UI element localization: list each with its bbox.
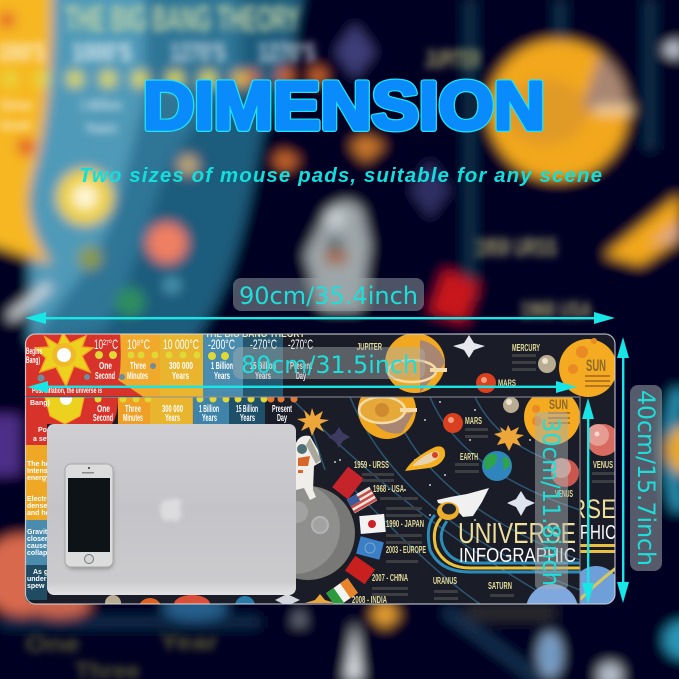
- small mouse pad 80x30: Electro: [27, 496, 51, 503]
- sun upper: SUN: [586, 356, 606, 375]
- white star upper: [453, 335, 485, 358]
- small mouse pad 80x30: Intense: [27, 468, 52, 475]
- upper pad timeline labels: -270°C: [288, 336, 313, 352]
- small mouse pad 80x30: Years: [202, 413, 217, 424]
- small mouse pad 80x30: Post: [38, 427, 54, 434]
- dimension 40cm arrow: [617, 337, 629, 603]
- blue planet lower: [526, 584, 578, 604]
- large mouse pad 90x40: JUPITER: [357, 342, 382, 353]
- small mouse pad 80x30: dense: [27, 503, 47, 510]
- large mouse pad 90x40: Years: [214, 371, 230, 382]
- venus upper: [589, 424, 615, 456]
- blurred space background: 1000'S: [72, 37, 132, 67]
- blurred space background: 1270'S: [170, 37, 226, 67]
- blurred space background: One: [0, 97, 32, 114]
- planet lower jupiter: [358, 398, 417, 439]
- large mouse pad 90x40: VENUS: [593, 460, 613, 471]
- title: DIMENSION: [143, 68, 545, 144]
- mars upper: [476, 373, 496, 393]
- orange star: [297, 408, 329, 436]
- dimension 30cm label: 30cm/11.8inch: [537, 418, 565, 586]
- left timeline panel: [25, 397, 265, 600]
- venus lower: [551, 458, 579, 487]
- small mouse pad 80x30: 15 Billion: [236, 404, 258, 415]
- large mouse pad 90x40: [25, 329, 620, 614]
- small mouse pad 80x30: The hot: [27, 461, 53, 468]
- orange star right: [494, 425, 524, 451]
- small mouse pad 80x30: and hot: [27, 510, 53, 517]
- small mouse pad 80x30: Minutes: [123, 413, 143, 424]
- mission labels: 1959 - URSS: [354, 460, 389, 471]
- dimension 30cm arrow: [582, 398, 594, 604]
- subtitle: Two sizes of mouse pads, suitable for any scene: [79, 164, 602, 187]
- large mouse pad 90x40: Years: [255, 371, 271, 382]
- small mouse pad 80x30: Bang): [30, 400, 50, 407]
- mission labels: URANUS: [433, 576, 457, 587]
- sun lower: SUN: [549, 396, 568, 412]
- large mouse pad 90x40: Post inflation, the universe is: [32, 386, 102, 395]
- large mouse pad 90x40: THE BIG BANG THEORY: [205, 329, 305, 340]
- blurred space background: 1270'S: [258, 37, 316, 67]
- earth: [482, 451, 512, 481]
- large mouse pad 90x40: Three: [130, 361, 146, 372]
- small mouse pad 80x30: [25, 398, 580, 604]
- blurred space background: 1968 USA: [520, 297, 592, 324]
- small mouse pad 80x30: Day: [277, 413, 287, 424]
- upper universe heading: RSE: [570, 494, 616, 524]
- large mouse pad 90x40: Present: [290, 361, 312, 372]
- blurred space background: 1 Billion: [80, 97, 122, 114]
- white star lower: [507, 491, 535, 516]
- upper pad timeline labels: [94, 340, 313, 349]
- blurred space background: Year: [160, 629, 218, 656]
- small mouse pad 80x30: under: [27, 576, 47, 583]
- small mouse pad 80x30: energy: [27, 475, 50, 482]
- large mouse pad 90x40: Bang): [26, 355, 40, 365]
- upper pad timeline labels: 10²⁷°C: [94, 336, 118, 352]
- blue planet upper: [580, 566, 615, 604]
- logo swoosh arcs: [428, 515, 580, 572]
- small mouse pad 80x30: 300 000: [162, 404, 183, 415]
- small mouse pad 80x30: closer: [27, 536, 48, 543]
- small mouse pad 80x30: Present: [272, 404, 292, 415]
- mission labels: 2007 - CHINA: [372, 573, 408, 584]
- large mouse pad 90x40: 15 Billion: [250, 361, 276, 372]
- small mouse pad 80x30: collap: [27, 550, 47, 557]
- mission labels: 1968 - USA: [373, 484, 404, 495]
- universe infographic heading: UNIVERSE: [458, 518, 576, 550]
- upper pad timeline labels: 10⁸°C: [127, 336, 150, 352]
- mission labels: 2003 - EUROPE: [386, 545, 426, 556]
- large mouse pad 90x40: MARS: [498, 378, 516, 388]
- large mouse pad 90x40: Second: [95, 371, 115, 382]
- mission labels: MARS: [465, 416, 482, 427]
- dimension 80cm arrow: [27, 381, 577, 393]
- moon: [296, 486, 355, 580]
- small mouse pad 80x30: Years: [240, 413, 255, 424]
- small mouse pad 80x30: VENUS: [555, 489, 573, 500]
- upper pad timeline labels: -200°C: [208, 336, 235, 352]
- orbit lines: [290, 397, 580, 604]
- dimension 80cm label: 80cm/31.5inch: [241, 351, 418, 379]
- mission labels: SATURN: [488, 581, 512, 592]
- large mouse pad 90x40: Begins: [26, 346, 42, 356]
- large mouse pad 90x40: Minutes: [127, 371, 148, 382]
- mission labels: 2008 - INDIA: [352, 595, 387, 606]
- large mouse pad 90x40: 1 Billion: [211, 361, 233, 372]
- small mouse pad 80x30: a sett: [33, 436, 52, 443]
- small mouse pad 80x30: cause: [27, 543, 47, 550]
- sunburst upper: [35, 333, 93, 386]
- small mouse pad 80x30: One: [97, 404, 110, 415]
- upper pad timeline labels: 10 000°C: [163, 336, 199, 352]
- astronaut: [296, 436, 321, 500]
- flags: [326, 467, 386, 608]
- title: DIMENSION: [143, 68, 545, 144]
- blurred space background: 1959 URSS: [475, 232, 557, 262]
- blurred space background: Years: [85, 120, 117, 137]
- large mouse pad 90x40: MERCURY: [512, 343, 540, 354]
- mission labels: EARTH: [460, 452, 478, 463]
- dark star: [328, 427, 350, 448]
- blurred space background: Second: [0, 117, 30, 134]
- pad edge outlines: [26, 334, 615, 604]
- planet upper jupiter: [385, 333, 447, 393]
- bottom row planets: [105, 594, 333, 604]
- mercury upper: [538, 355, 556, 373]
- small mouse pad 80x30: Gravity: [27, 529, 51, 536]
- large mouse pad 90x40: One: [99, 361, 112, 372]
- comet: [405, 446, 445, 471]
- dimension 40cm label: 40cm/15.7inch: [632, 390, 660, 566]
- large mouse pad 90x40: 300 000: [169, 361, 193, 372]
- shuttle: [437, 488, 489, 520]
- dimension 90cm label: 90cm/35.4inch: [239, 282, 418, 310]
- sun upper: [559, 338, 617, 397]
- mercury lower: [503, 397, 519, 413]
- small mouse pad 80x30: Second: [93, 413, 113, 424]
- mission labels: 1990 - JAPAN: [386, 519, 424, 530]
- upper pad timeline labels: -270°C: [250, 336, 277, 352]
- large mouse pad 90x40: PHIC: [580, 522, 616, 544]
- laptop: [47, 424, 296, 595]
- blurred space background: One: [25, 631, 80, 658]
- large mouse pad 90x40: Years: [172, 371, 189, 382]
- blurred space background: JUPITER: [425, 44, 481, 74]
- small mouse pad 80x30: 1 Billion: [199, 404, 219, 415]
- universe infographic heading: [460, 522, 576, 562]
- small mouse pad 80x30: spew: [27, 583, 45, 590]
- mars lower: [443, 413, 463, 433]
- dimension 90cm arrow: [25, 312, 615, 324]
- large mouse pad 90x40: Day: [296, 371, 306, 382]
- universe infographic heading: INFOGRAPHIC: [459, 545, 576, 567]
- phone: [65, 464, 113, 569]
- mission labels: [352, 416, 512, 606]
- small mouse pad 80x30: Three: [125, 404, 141, 415]
- small mouse pad 80x30: As g: [33, 569, 48, 576]
- sun lower: [524, 398, 580, 445]
- small mouse pad 80x30: Years: [165, 413, 180, 424]
